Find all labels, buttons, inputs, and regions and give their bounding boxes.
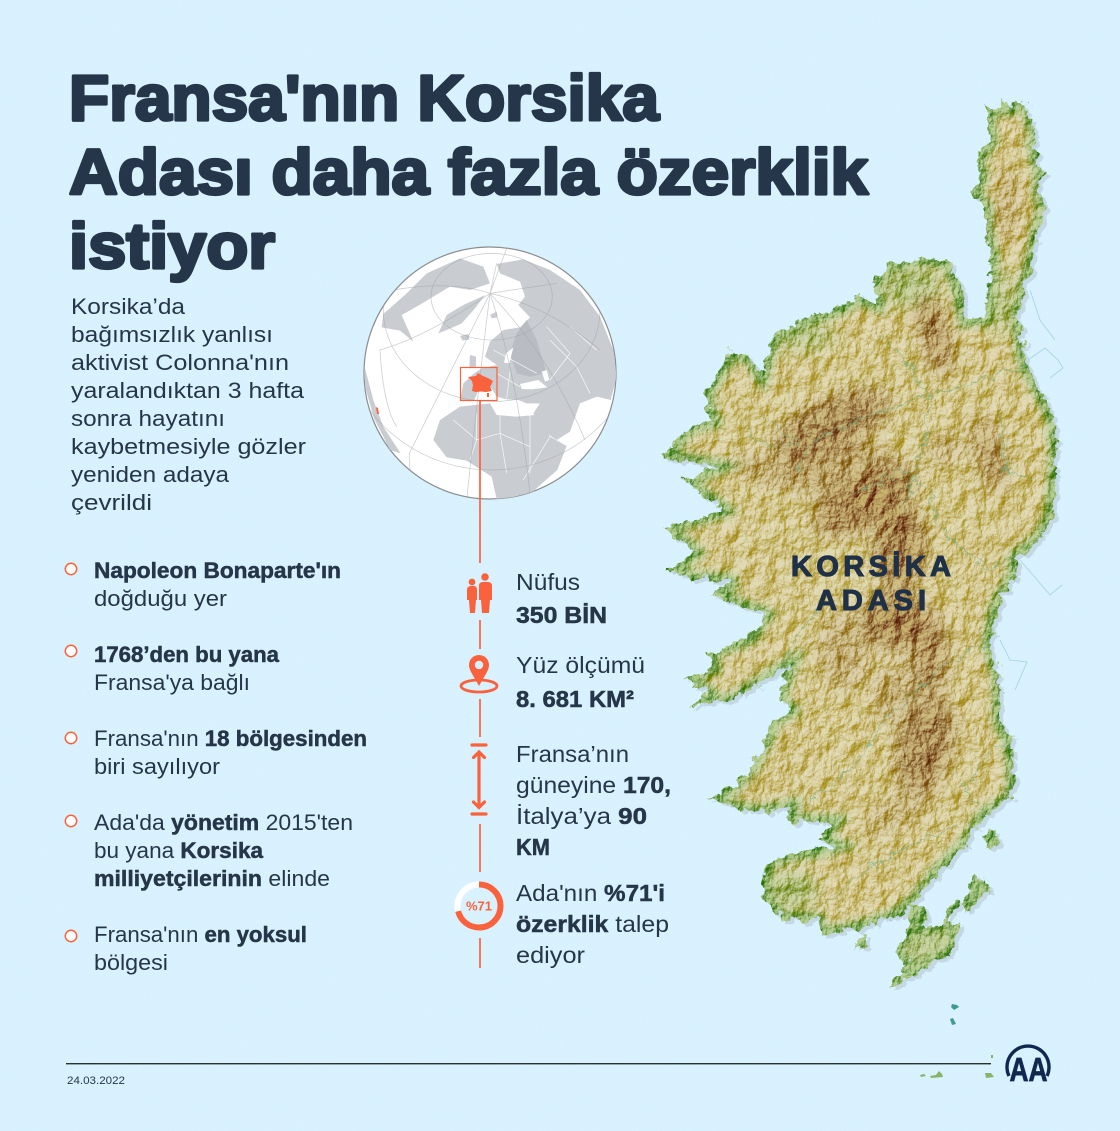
logo: AA: AA [1010, 1051, 1048, 1088]
title: istiyor [69, 210, 275, 282]
population text: 350 BİN [516, 602, 607, 628]
distance text: güneyine 170, [516, 772, 671, 798]
population text [516, 569, 607, 628]
distance text: Fransa’nın [516, 741, 629, 767]
intro paragraph: bağımsızlık yanlısı [71, 322, 273, 347]
coastal water lines [1000, 290, 1063, 690]
bullet 4 [65, 810, 353, 891]
locator box [460, 368, 497, 400]
title: Adası daha fazla özerklik [69, 136, 868, 208]
bullet 2 [65, 642, 279, 695]
intro paragraph: kaybetmesiyle gözler [71, 434, 306, 459]
France highlight [468, 373, 493, 392]
bullet 4: bu yana Korsika [94, 838, 263, 863]
intro paragraph: Korsika’da [71, 294, 186, 319]
autonomy text [516, 880, 669, 968]
intro paragraph: çevrildi [71, 490, 152, 515]
icon: 71 percent donut [458, 884, 500, 928]
bullet 1: doğduğu yer [94, 586, 228, 611]
intro paragraph: yeniden adaya [71, 462, 230, 487]
bullet 4: milliyetçilerinin elinde [94, 866, 330, 891]
map label [791, 551, 951, 617]
bullet list [65, 558, 367, 975]
distance text [516, 741, 671, 860]
intro paragraph: aktivist Colonna'nın [71, 350, 289, 375]
bullet 3: biri sayılıyor [94, 754, 221, 779]
icon: 71 percent donut: %71 [466, 898, 492, 914]
bullet 4: Ada'da yönetim 2015'ten [94, 810, 353, 835]
icon: distance arrow [472, 745, 486, 814]
distance text: KM [516, 834, 550, 860]
population text: Nüfus [516, 569, 580, 595]
intro paragraph [71, 294, 306, 515]
map label: ADASI [816, 585, 926, 617]
area text: 8. 681 KM² [516, 686, 634, 712]
bullet 5 [65, 922, 307, 975]
map: Corsica island relief [661, 98, 1064, 1078]
title [69, 62, 868, 282]
area text [516, 652, 645, 712]
autonomy text: özerklik talep [516, 911, 669, 937]
bullet 2: 1768’den bu yana [94, 642, 279, 667]
bullet 1: Napoleon Bonaparte'ın [94, 558, 341, 583]
bullet 3 [65, 726, 367, 779]
bullet 5: Fransa'nın en yoksul [94, 922, 307, 947]
connector line [479, 400, 481, 968]
title: Fransa'nın Korsika [69, 62, 659, 134]
date: 24.03.2022 [67, 1075, 125, 1087]
globe locator [363, 246, 617, 500]
map label: KORSİKA [791, 551, 951, 583]
autonomy text: ediyor [516, 942, 585, 968]
bullet 1 [65, 558, 341, 611]
intro paragraph: yaralandıktan 3 hafta [71, 378, 305, 403]
icon: location pin [461, 655, 497, 692]
footer rule [66, 1063, 991, 1064]
bullet 5: bölgesi [94, 950, 168, 975]
bullet 3: Fransa'nın 18 bölgesinden [94, 726, 367, 751]
icon: people [467, 573, 492, 613]
area text: Yüz ölçümü [516, 652, 645, 678]
distance text: İtalya’ya 90 [516, 803, 647, 829]
intro paragraph: sonra hayatını [71, 406, 225, 431]
bullet 2: Fransa'ya bağlı [94, 670, 250, 695]
autonomy text: Ada'nın %71'i [516, 880, 665, 906]
small islets [920, 1004, 994, 1078]
